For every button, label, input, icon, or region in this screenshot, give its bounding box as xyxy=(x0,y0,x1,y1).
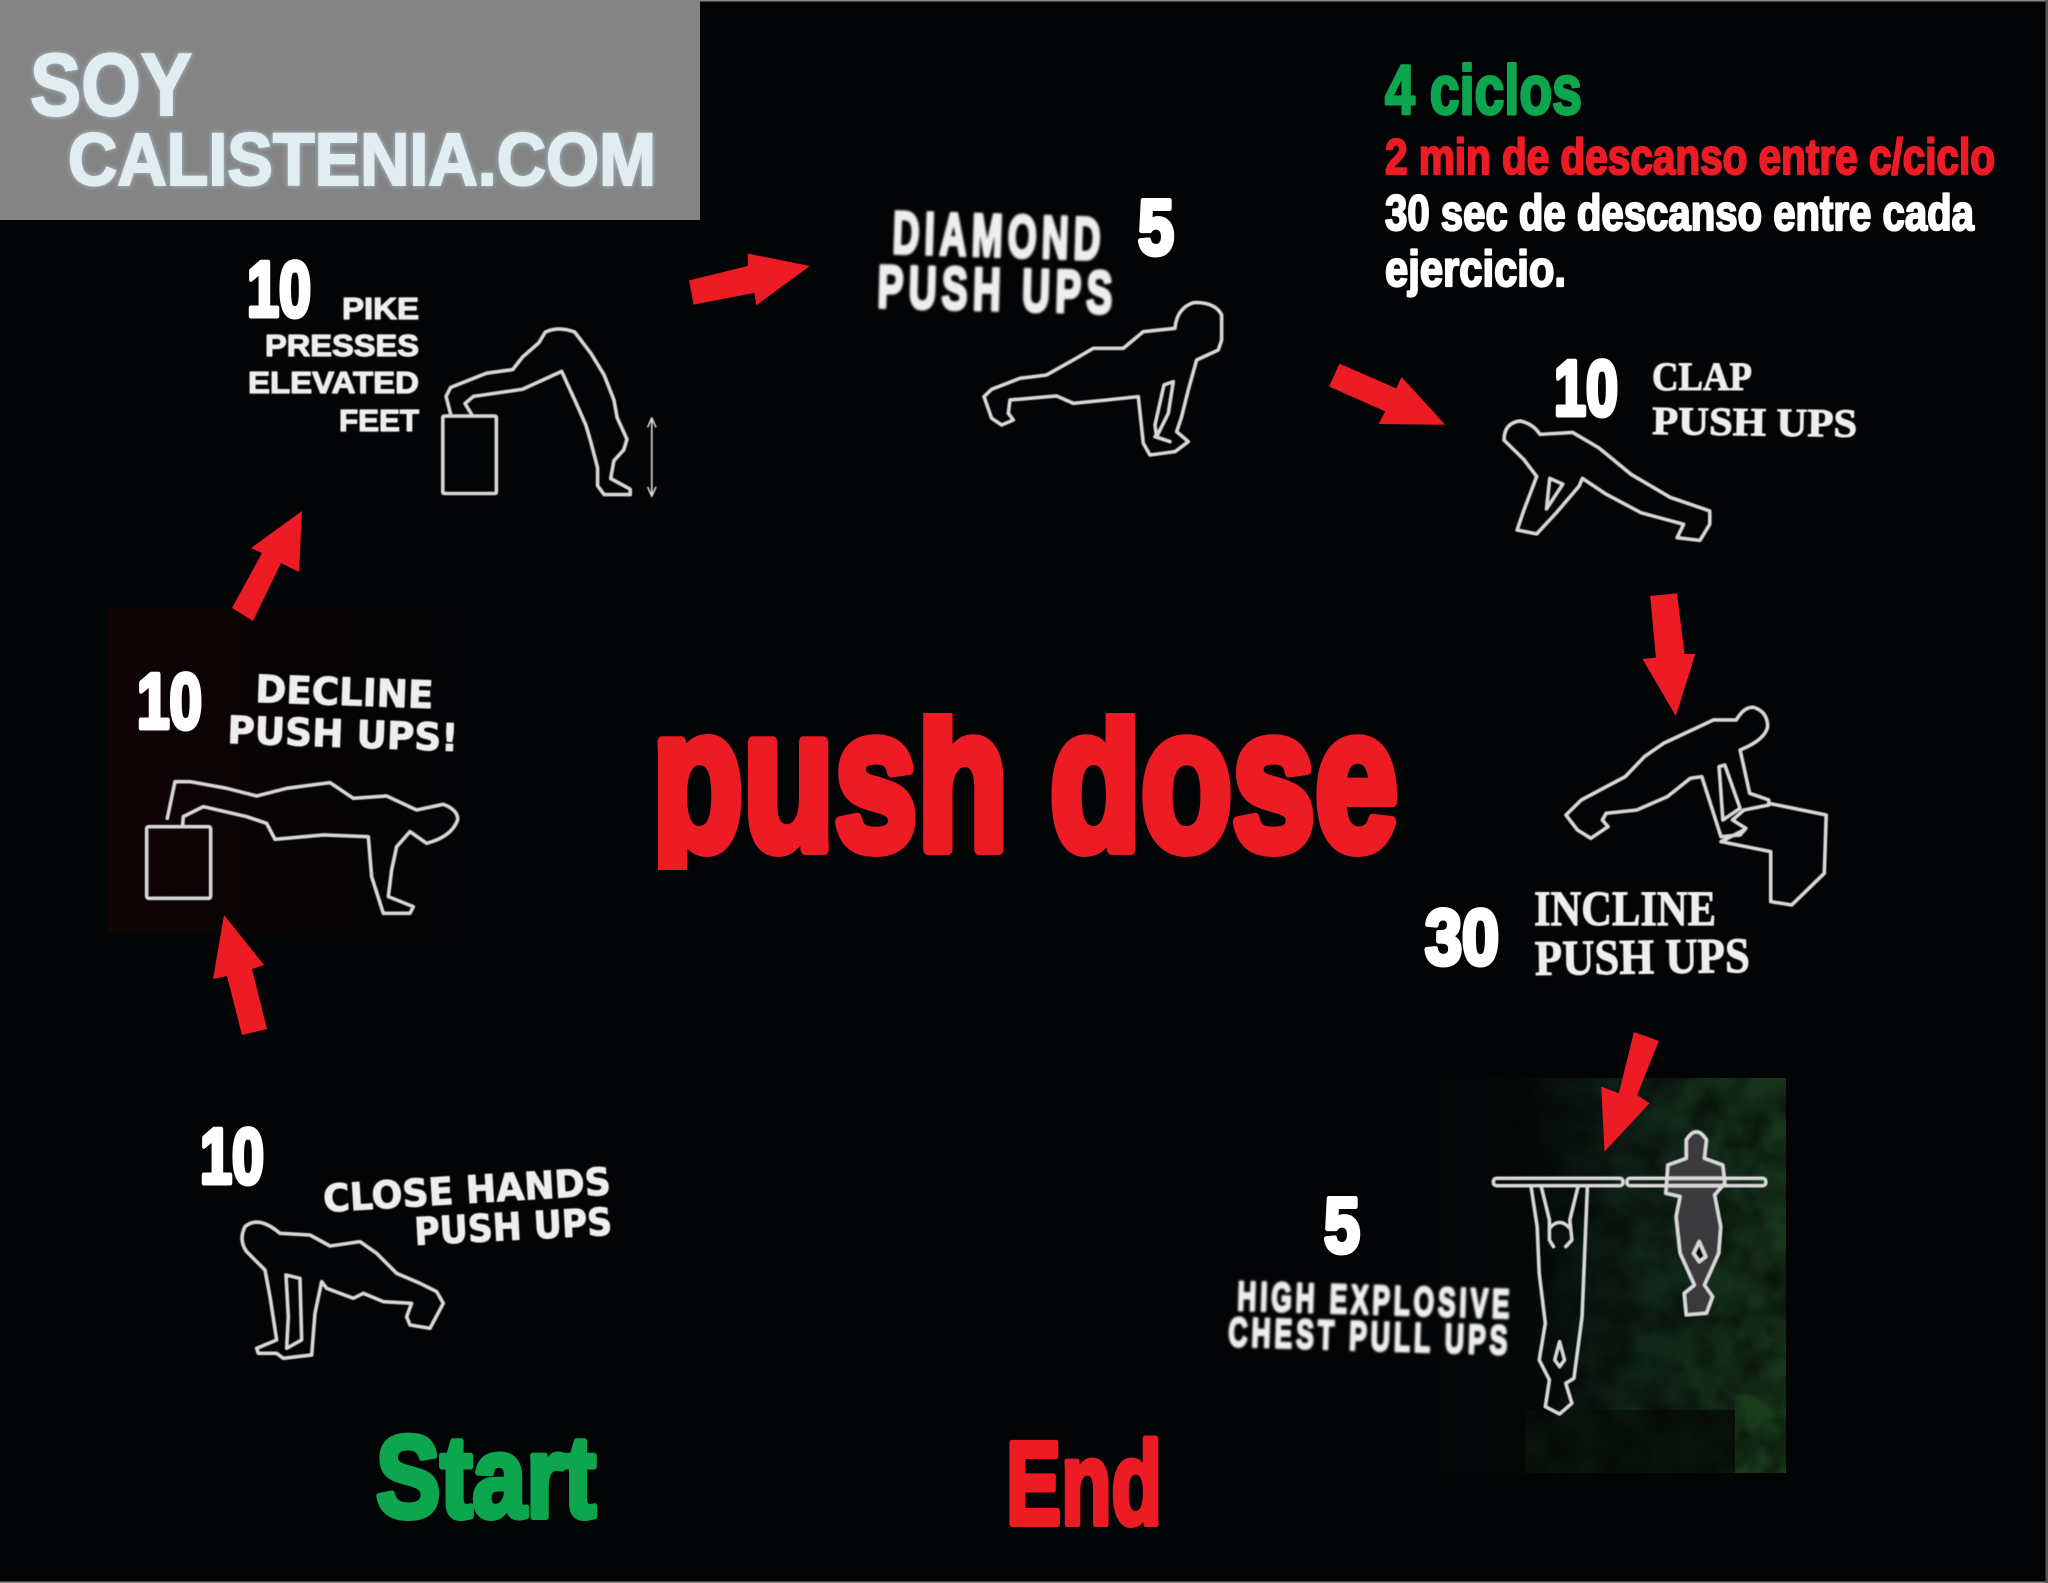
label: close hands push ups: PUSH UPS xyxy=(413,1200,613,1254)
label: decline push ups xyxy=(227,667,459,760)
label: pike presses elevated feet: PRESSES xyxy=(265,328,419,363)
icon: close hands push up figure xyxy=(242,1222,443,1358)
info text block xyxy=(1385,51,1995,297)
exercise: incline push ups xyxy=(1425,707,1826,986)
reps: 10: 10 xyxy=(1554,344,1618,432)
reps: 10: 10 xyxy=(247,245,311,333)
exercise: diamond push ups xyxy=(877,183,1222,455)
label: incline push ups xyxy=(1534,880,1750,986)
label: diamond push ups: PUSH UPS xyxy=(877,253,1118,326)
icon: clap push up figure xyxy=(1504,421,1710,540)
label: decline push ups: PUSH UPS! xyxy=(227,708,459,760)
end label: End xyxy=(1006,1418,1162,1550)
label: pike presses elevated feet: FEET xyxy=(339,403,419,438)
label: pike presses elevated feet: PIKE xyxy=(342,291,419,326)
label: high explosive chest pull ups: CHEST PULL UPS xyxy=(1228,1309,1512,1363)
label: clap push ups xyxy=(1652,354,1857,446)
arrow: decline to pike xyxy=(232,511,302,621)
arrow: incline to pull ups xyxy=(1601,1032,1659,1152)
reps: 10: 10 xyxy=(200,1112,264,1200)
logo text xyxy=(30,35,656,201)
label: decline push ups: DECLINE xyxy=(255,667,434,717)
label: incline push ups: INCLINE xyxy=(1534,880,1716,936)
exercise: pike presses xyxy=(247,245,656,496)
label: pike presses elevated feet xyxy=(248,291,419,438)
label: high explosive chest pull ups xyxy=(1228,1273,1514,1363)
icon: decline push up figure xyxy=(147,782,458,913)
label: high explosive chest pull ups: HIGH EXPLOSIVE xyxy=(1237,1273,1514,1327)
label: clap push ups: PUSH UPS xyxy=(1652,398,1857,446)
arrow: close hands to decline xyxy=(213,915,267,1035)
reps: 5: 5 xyxy=(1138,183,1174,271)
reps: 30: 30 xyxy=(1425,893,1499,981)
logo text: CALISTENIA.COM xyxy=(68,118,656,201)
label: incline push ups: PUSH UPS xyxy=(1534,927,1750,986)
arrow: clap to incline xyxy=(1643,593,1695,716)
exercise: clap push ups xyxy=(1504,344,1857,540)
reps: 10: 10 xyxy=(137,657,202,745)
icon: pike press figure xyxy=(443,329,656,496)
label: close hands push ups: CLOSE HANDS xyxy=(322,1159,612,1221)
background panel xyxy=(108,608,470,933)
info text block: 4 ciclos xyxy=(1385,51,1582,129)
logo panel xyxy=(0,0,700,220)
exercise: chest pull ups xyxy=(1228,1078,1786,1473)
icon: pull up figures on bar xyxy=(1493,1132,1766,1414)
title: push dose xyxy=(652,666,1398,892)
label: diamond push ups: DIAMOND xyxy=(892,199,1107,273)
label: close hands push ups xyxy=(322,1159,613,1254)
background texture panel xyxy=(1413,1078,1786,1473)
icon: incline push up figure xyxy=(1566,707,1826,905)
icon: diamond push up figure xyxy=(984,303,1222,455)
arrow: diamond to clap xyxy=(1329,364,1445,425)
label: clap push ups: CLAP xyxy=(1652,354,1752,399)
info text block: ejercicio. xyxy=(1385,241,1566,297)
exercise: close hands push ups xyxy=(200,1112,613,1358)
reps: 5: 5 xyxy=(1324,1181,1360,1269)
label: diamond push ups xyxy=(877,199,1118,326)
exercise: decline push ups xyxy=(108,608,470,933)
arrow: pike to diamond xyxy=(689,254,810,305)
label: pike presses elevated feet: ELEVATED xyxy=(248,365,419,400)
start label: Start xyxy=(376,1412,596,1542)
logo text: SOY xyxy=(30,35,192,134)
